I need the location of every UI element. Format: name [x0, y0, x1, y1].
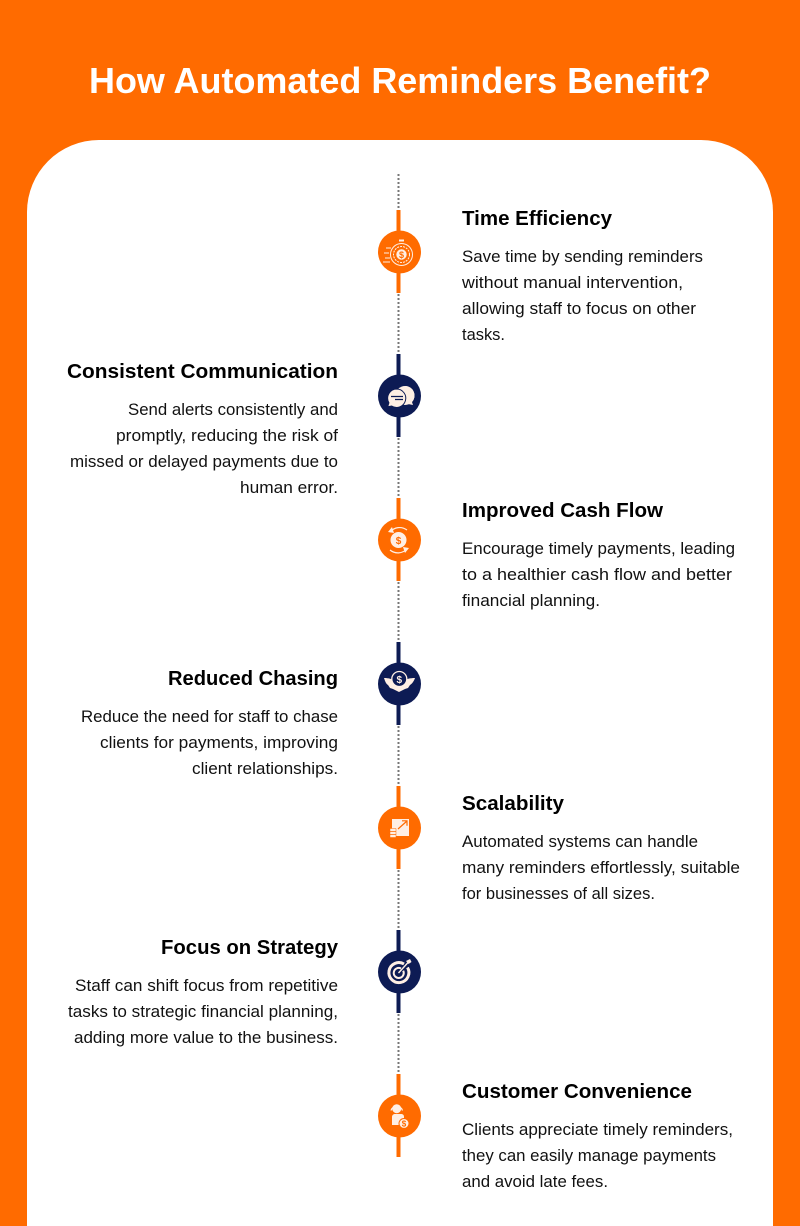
text block: tasks. [462, 326, 505, 344]
step 2: consistent communication [67, 354, 421, 497]
text block [462, 540, 735, 610]
icon: chat bubbles [388, 386, 415, 407]
icon: winged dollar coin: $ [397, 675, 403, 686]
text block: clients for payments, improving [100, 734, 338, 752]
text block: Encourage timely payments, leading [462, 540, 735, 558]
title: How Automated Reminders Benefit? [89, 60, 711, 101]
text block [462, 833, 740, 903]
text block: Clients appreciate timely reminders, [462, 1121, 733, 1139]
text block: they can easily manage payments [462, 1147, 716, 1165]
heading: Consistent Communication [67, 360, 338, 383]
text block: Automated systems can handle [462, 833, 698, 851]
text block: adding more value to the business. [74, 1029, 338, 1047]
text block: tasks to strategic financial planning, [68, 1003, 338, 1021]
text block: missed or delayed payments due to [70, 453, 338, 471]
icon: target with arrow [389, 959, 412, 983]
text block [81, 708, 338, 778]
icon: circular arrows with dollar [388, 527, 409, 553]
step 5: scalability [378, 786, 740, 903]
text block: and avoid late fees. [462, 1173, 608, 1191]
text block: to a healthier cash flow and better [462, 566, 733, 584]
text block [68, 977, 338, 1047]
text block [461, 248, 703, 344]
icon: scaling square with coins [390, 819, 409, 838]
text block: many reminders effortlessly, suitable [462, 859, 740, 877]
step 3: improved cash flow [378, 498, 735, 610]
marker: orange bar and circle [378, 786, 421, 869]
text block: human error. [240, 479, 338, 497]
step 1: time efficiency [378, 207, 703, 344]
heading: Customer Convenience [462, 1080, 692, 1103]
marker: orange bar and circle [378, 210, 421, 293]
heading: Focus on Strategy [161, 936, 339, 959]
marker: navy bar and circle [378, 930, 421, 1013]
text block: for businesses of all sizes. [462, 885, 655, 903]
step 7: customer convenience [378, 1074, 733, 1191]
marker: navy bar and circle [378, 642, 421, 725]
text block: Reduce the need for staff to chase [81, 708, 338, 726]
icon: winged dollar coin [384, 672, 415, 692]
heading: Reduced Chasing [168, 667, 338, 690]
icon: customer with headset and coin [391, 1104, 409, 1128]
text block: Send alerts consistently and [128, 401, 338, 419]
step 6: focus on strategy [68, 930, 421, 1047]
icon: customer with headset and coin: $ [402, 1120, 407, 1128]
text block [462, 1121, 733, 1191]
icon: stopwatch with dollar: $ [399, 250, 404, 260]
marker: orange bar and circle [378, 1074, 421, 1157]
step 4: reduced chasing [81, 642, 421, 778]
text block: Staff can shift focus from repetitive [75, 977, 338, 995]
heading: Improved Cash Flow [462, 499, 663, 522]
marker: navy bar and circle [378, 354, 421, 437]
text block: without manual intervention, [461, 274, 683, 292]
icon: stopwatch with dollar [383, 240, 412, 266]
text block: financial planning. [462, 592, 600, 610]
marker: orange bar and circle [378, 498, 421, 581]
text block: Save time by sending reminders [462, 248, 703, 266]
text block: promptly, reducing the risk of [116, 427, 338, 445]
heading: Time Efficiency [462, 207, 613, 230]
text block [70, 401, 338, 497]
icon: circular arrows with dollar: $ [396, 536, 402, 547]
text block: client relationships. [192, 760, 338, 778]
text block: allowing staff to focus on other [462, 300, 697, 318]
heading: Scalability [462, 792, 565, 815]
